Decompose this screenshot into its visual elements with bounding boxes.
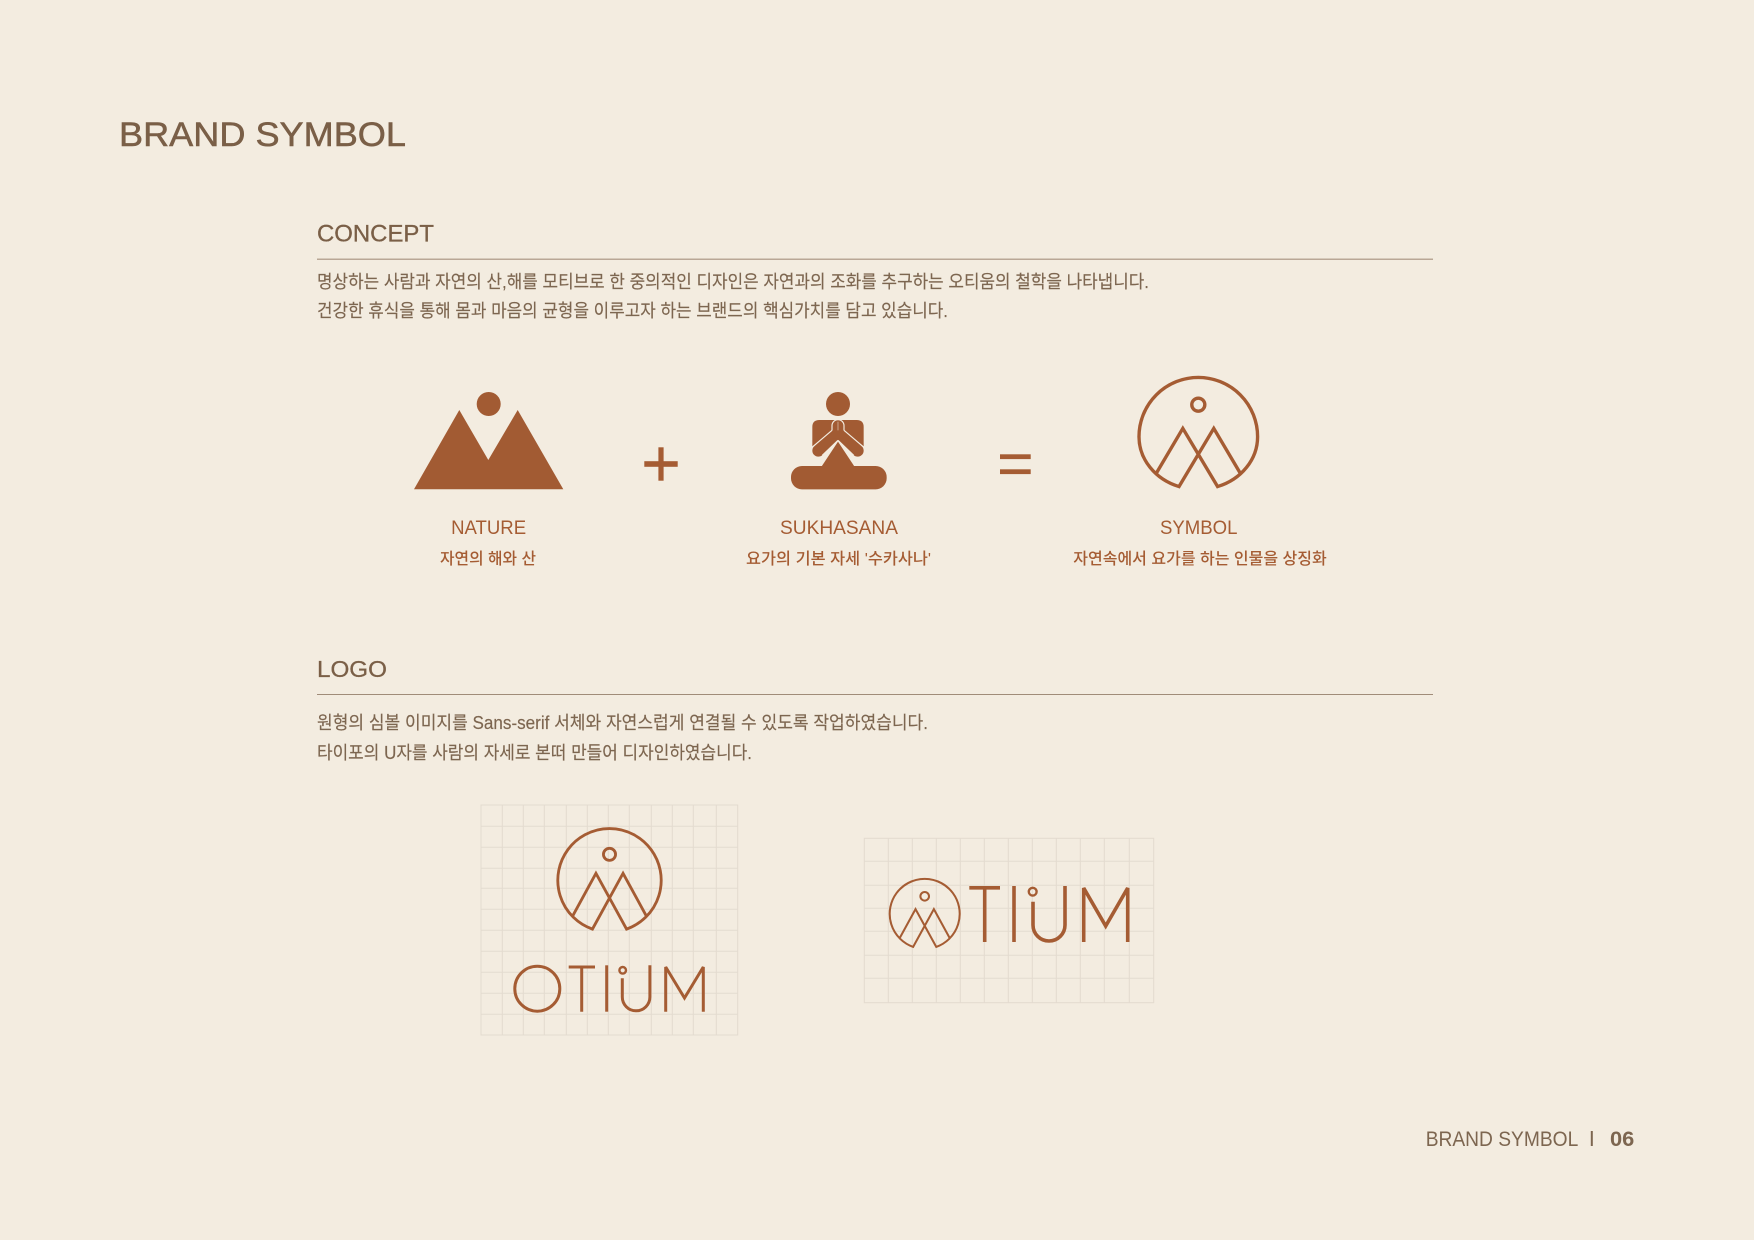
label: sukhasana: 요가의 기본 자세 '수카사나' [746, 550, 931, 568]
body separating lines [812, 420, 864, 455]
text block: concept description: 명상하는 사람과 자연의 산,해를 모티브로 한 중의적인 디자인은 자연과의 조화를 추구하는 오티움의 철학을 나타냅니다. [317, 272, 1149, 292]
logo: vertical lockup on grid [481, 805, 738, 1035]
wordmark: TIUM [969, 886, 1128, 942]
label: sukhasana: SUKHASANA [780, 518, 898, 539]
label: sukhasana [746, 518, 931, 568]
grid: vertical lockup [481, 805, 738, 1035]
wordmark: OTIUM [515, 965, 703, 1012]
footer: page label: BRAND SYMBOL [1426, 1128, 1578, 1151]
footer: page label: 06 [1610, 1128, 1634, 1151]
symbol mark [890, 879, 960, 947]
label: nature: 자연의 해와 산 [440, 550, 536, 568]
text block: logo description: 타이포의 U자를 사람의 자세로 본떠 만들어 디자인하였습니다. [317, 743, 752, 763]
section: logo [317, 656, 1433, 763]
icon: equals [1000, 454, 1031, 474]
label: nature: NATURE [451, 518, 526, 539]
text block: logo description: 원형의 심볼 이미지를 Sans-serif 서체와 자연스럽게 연결될 수 있도록 작업하였습니다. [317, 713, 928, 733]
symbol mark [558, 829, 661, 929]
body silhouette [791, 420, 887, 489]
label: symbol: SYMBOL [1160, 518, 1237, 539]
label: nature [440, 518, 536, 568]
grid: horizontal lockup [864, 838, 1154, 1003]
logo: horizontal lockup on grid [864, 838, 1154, 1003]
icon: plus [644, 447, 678, 481]
text block: concept description [317, 272, 1149, 321]
label: symbol [1073, 518, 1327, 568]
text block: concept description: 건강한 휴식을 통해 몸과 마음의 균형을 이루고자 하는 브랜드의 핵심가치를 담고 있습니다. [317, 301, 948, 321]
icon: sukhasana figure [791, 392, 887, 489]
icon: symbol [1139, 377, 1258, 487]
heading: concept: CONCEPT [317, 220, 434, 248]
heading: logo: LOGO [317, 656, 387, 682]
section: concept [317, 220, 1433, 321]
icon: nature [414, 392, 563, 489]
text block: logo description [317, 713, 928, 763]
label: symbol: 자연속에서 요가를 하는 인물을 상징화 [1073, 550, 1327, 568]
title: BRAND SYMBOL [119, 116, 406, 154]
